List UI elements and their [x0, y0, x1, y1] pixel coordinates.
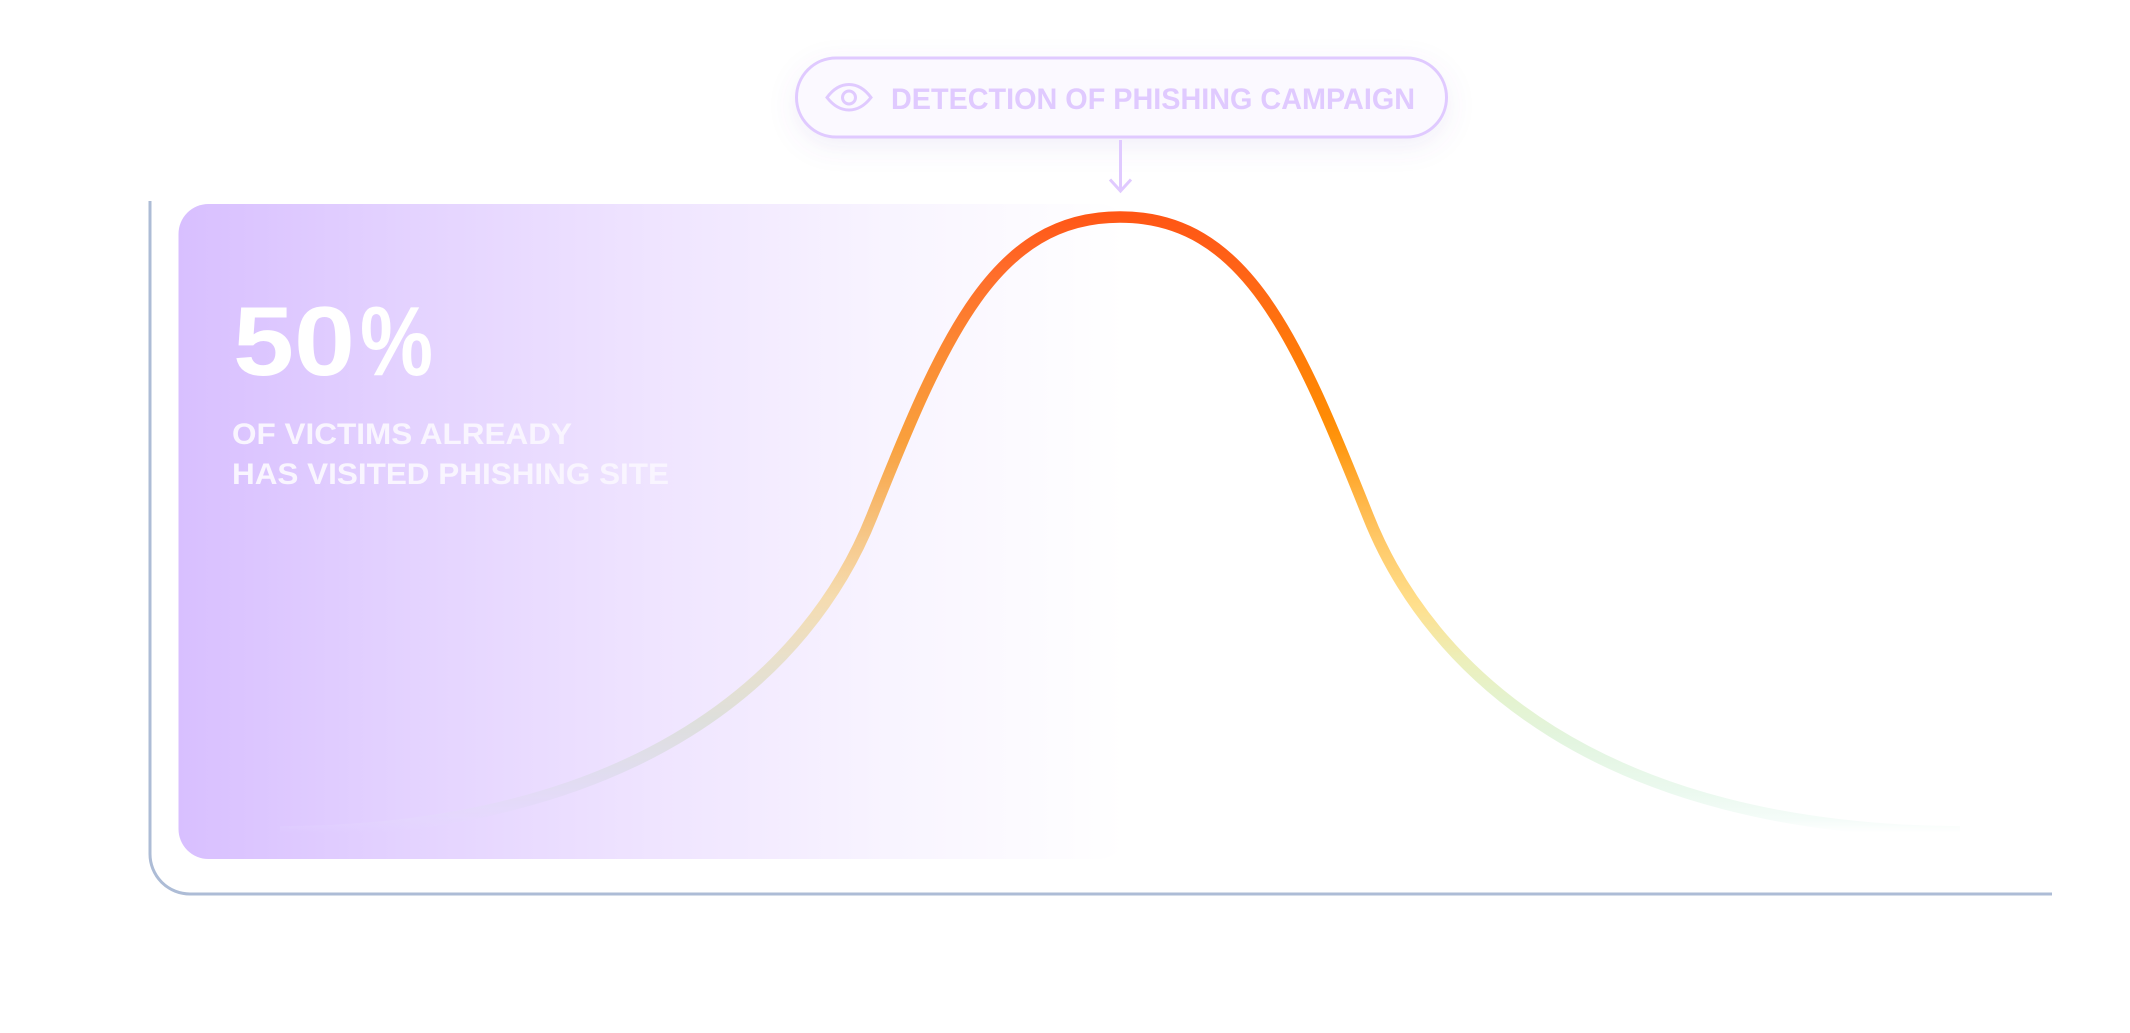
icon: eye: [827, 84, 871, 110]
curve: rising side: [280, 217, 1120, 832]
curve: falling side: [1120, 217, 1960, 832]
panel: share of victims who already visited: [178, 204, 1128, 859]
callout label: DETECTION OF PHISHING CAMPAIGN: [891, 83, 1415, 116]
description line 1: OF VICTIMS ALREADY: [232, 418, 572, 451]
statistic description: [232, 418, 669, 491]
statistic: 50%: [233, 286, 433, 396]
callout pill: [796, 58, 1446, 137]
bell curve: [280, 217, 1960, 832]
arrow: pointing to curve peak: [1110, 140, 1131, 191]
description line 2: HAS VISITED PHISHING SITE: [232, 458, 669, 491]
statistic digits: 50: [233, 286, 355, 396]
statistic percent sign: %: [360, 286, 433, 396]
chart axes: [150, 201, 2052, 894]
callout: detection of phishing campaign: [796, 58, 1446, 137]
